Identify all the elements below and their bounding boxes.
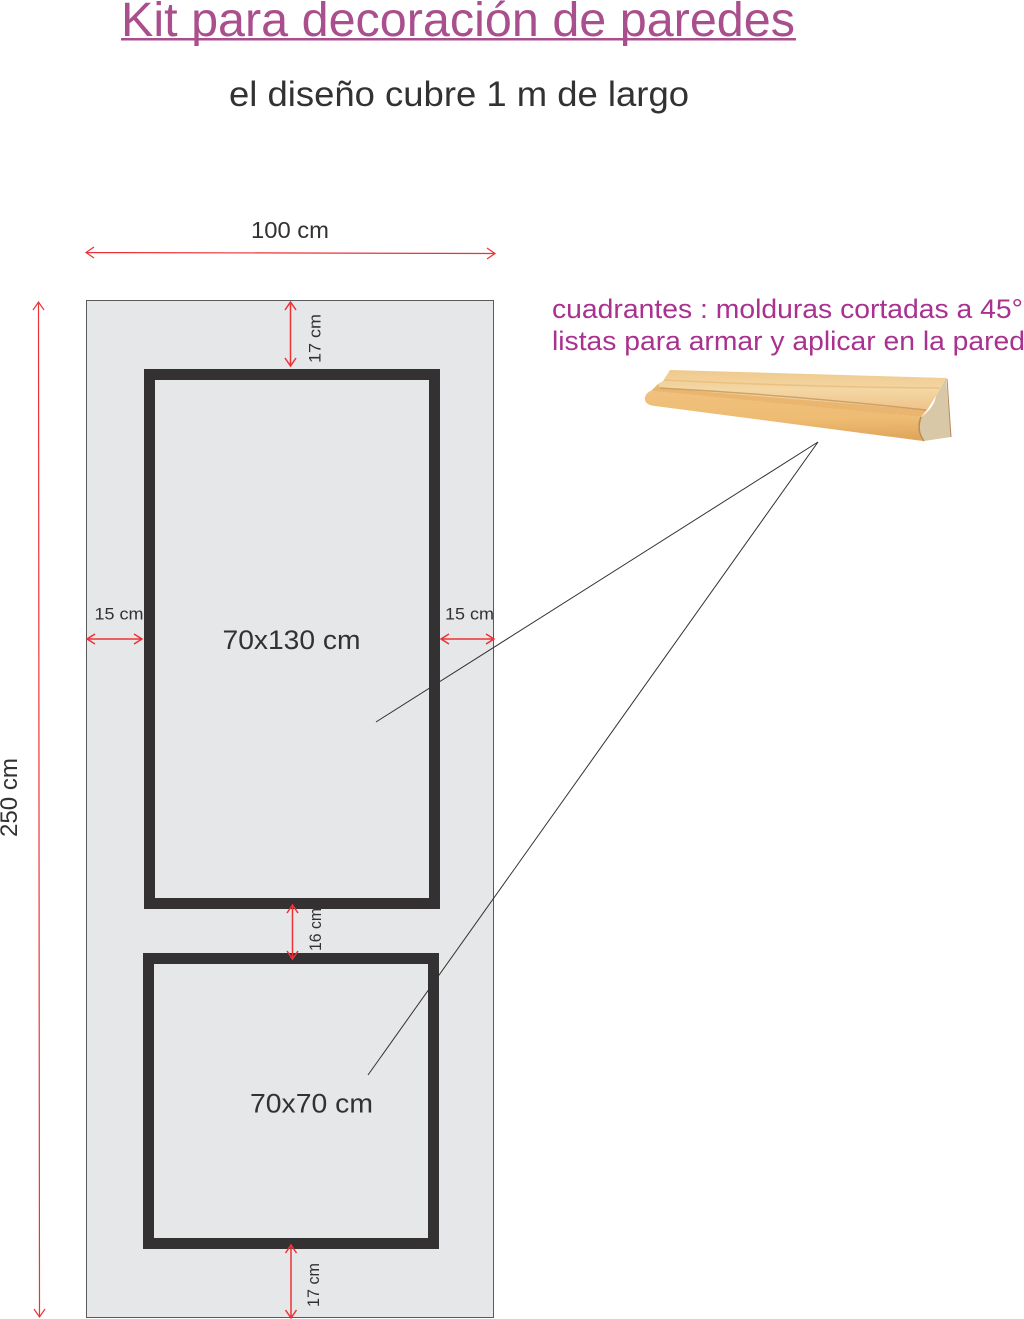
lower frame 70x70 — [148, 958, 434, 1244]
molding note — [552, 294, 1024, 356]
upper frame 70x130 — [150, 374, 434, 904]
right margin dimension: 15 cm: 15 cm — [445, 604, 494, 624]
bottom margin dimension: 17 cm: 17 cm — [304, 1263, 323, 1307]
icon: wooden molding — [645, 370, 951, 441]
upper frame label: 70x130 cm — [222, 625, 360, 655]
lower frame label: 70x70 cm — [250, 1088, 373, 1118]
gap dimension: 16 cm: 16 cm — [306, 908, 325, 951]
left margin dimension: 15 cm: 15 cm — [94, 604, 144, 624]
wall panel — [86, 300, 494, 1318]
left margin dimension: 15 cm — [87, 604, 144, 644]
right margin dimension: 15 cm — [441, 604, 494, 644]
molding note: listas para armar y aplicar en la pared — [552, 326, 1024, 356]
subtitle: el diseño cubre 1 m de largo — [229, 75, 689, 114]
width dimension: 100 cm — [86, 217, 495, 259]
gap dimension: 16 cm — [287, 905, 325, 959]
top margin dimension: 17 cm — [285, 302, 324, 366]
width dimension: 100 cm: 100 cm — [251, 217, 329, 243]
molding note: cuadrantes : molduras cortadas a 45° — [552, 294, 1023, 324]
leader lines to molding — [368, 442, 818, 1075]
top margin dimension: 17 cm: 17 cm — [306, 314, 324, 363]
bottom margin dimension: 17 cm — [286, 1245, 323, 1318]
height dimension: 250 cm — [0, 302, 45, 1317]
